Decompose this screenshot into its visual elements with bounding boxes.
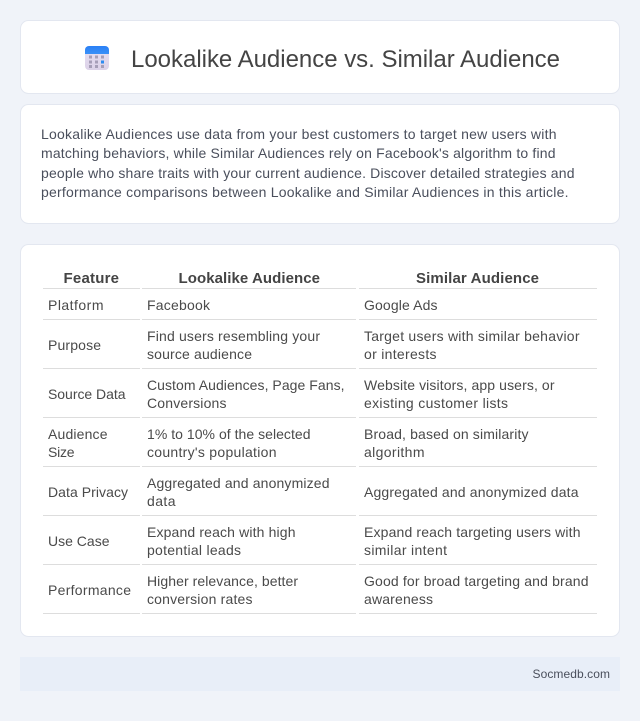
title: Lookalike Audience vs. Similar Audience [131, 46, 560, 73]
row: use case: Expand reach targeting users with [364, 524, 580, 540]
row: audience size: Broad, based on similarity [364, 426, 528, 442]
row: data privacy [48, 475, 579, 509]
row: purpose: or interests [364, 346, 436, 362]
icon: calendar [85, 46, 109, 70]
row: platform: Platform [48, 297, 104, 313]
row: performance: conversion rates [147, 591, 252, 607]
row: platform: Facebook [147, 297, 211, 313]
row: source data: Source Data [48, 386, 126, 402]
row: data privacy: Data Privacy [48, 484, 128, 500]
row: source data: existing customer lists [364, 395, 508, 411]
row: audience size: algorithm [364, 444, 424, 460]
row: use case: Expand reach with high [147, 524, 296, 540]
row: audience size: country's population [147, 444, 276, 460]
intro paragraph: matching behaviors, while Similar Audiences rely on Facebook's algorithm to find [41, 145, 556, 161]
row: platform: Google Ads [364, 297, 438, 313]
row: source data [48, 377, 555, 411]
intro paragraph: Lookalike Audiences use data from your best customers to target new users with [41, 126, 556, 142]
row: data privacy: data [147, 493, 176, 509]
row: source data: Website visitors, app users, or [364, 377, 555, 393]
comparison table [43, 270, 597, 614]
footer credit: Socmedb.com [532, 667, 610, 681]
table header: Similar Audience [416, 270, 539, 287]
intro paragraph: performance comparisons between Lookalike and Similar Audiences in this article. [41, 184, 568, 200]
row: purpose [48, 328, 580, 362]
intro paragraph: people who share traits with your current audience. Discover detailed strategies and [41, 165, 574, 181]
row: performance: Performance [48, 582, 131, 598]
intro text card [20, 104, 620, 224]
row: purpose: source audience [147, 346, 252, 362]
row: use case: similar intent [364, 542, 447, 558]
row: audience size: Audience [48, 426, 108, 442]
row: source data: Custom Audiences, Page Fans, [147, 377, 344, 393]
row: use case: Use Case [48, 533, 110, 549]
row: source data: Conversions [147, 395, 226, 411]
row: purpose: Purpose [48, 337, 101, 353]
intro paragraph [41, 126, 574, 200]
row: purpose: Find users resembling your [147, 328, 320, 344]
row: audience size [48, 426, 528, 460]
row: use case: potential leads [147, 542, 241, 558]
title card [20, 20, 620, 94]
row: performance [48, 573, 588, 607]
table header: Feature [64, 270, 119, 287]
row: performance: Good for broad targeting and brand [364, 573, 588, 589]
row: performance: Higher relevance, better [147, 573, 298, 589]
table header [64, 270, 539, 287]
row: use case [48, 524, 580, 558]
table card [20, 244, 620, 636]
row: performance: awareness [364, 591, 433, 607]
row: audience size: Size [48, 444, 75, 460]
footer bar [20, 657, 620, 691]
row: data privacy: Aggregated and anonymized [147, 475, 330, 491]
row: audience size: 1% to 10% of the selected [147, 426, 310, 442]
row: platform [48, 297, 438, 313]
row: purpose: Target users with similar behavior [364, 328, 580, 344]
table header: Lookalike Audience [178, 270, 320, 287]
row: data privacy: Aggregated and anonymized data [364, 484, 579, 500]
